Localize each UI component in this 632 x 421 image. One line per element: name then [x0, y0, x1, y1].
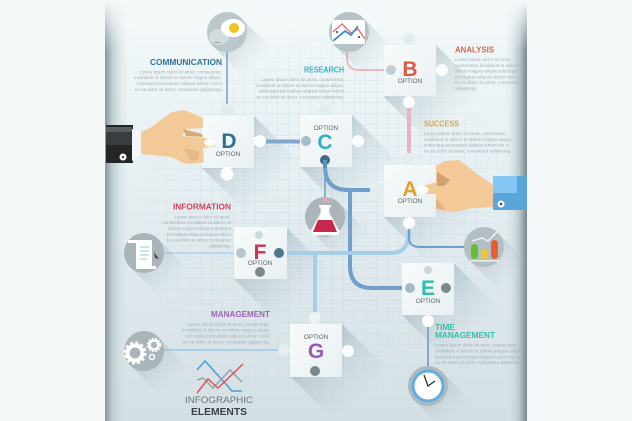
icon: flask: [305, 197, 369, 261]
heading and text: research: eu ea dolor sit amet, consetetur adipiscing.: [257, 94, 344, 100]
heading and text: time management: eu ea dolor sit amet, consetetur adipiscing.: [435, 360, 522, 365]
heading and text: information: perceptum aliquos lutrum est in: [167, 232, 231, 237]
puzzle piece D: D: [221, 130, 237, 153]
icon: bar chart: [464, 227, 528, 291]
heading and text: information: dolore magna aliqua suboutput: [168, 226, 232, 231]
heading and text: success: eu ea dolor sit amet, consetetur adipiscing.: [424, 148, 511, 154]
heading and text: time management: TIME: [435, 322, 455, 332]
heading and text: analysis: ANALYSIS: [455, 44, 494, 54]
heading and text: management: MANAGEMENT: [211, 309, 271, 319]
puzzle piece G: OPTION: [304, 334, 329, 341]
heading and text: management: [182, 309, 271, 344]
heading and text: management: Lorem ipsum dolor sit amet, consectetur,: [187, 322, 270, 327]
left hand with suit sleeve: [106, 110, 216, 164]
icon: document: [124, 233, 188, 297]
heading and text: communication: COMMUNICATION: [150, 57, 222, 67]
puzzle piece A: OPTION: [398, 198, 423, 205]
heading and text: time management: [435, 322, 523, 365]
logo: infographic elements: ELEMENTS: [191, 406, 247, 418]
heading and text: success: Lorem ipsum dolor sit amet, consectetur,: [424, 131, 507, 136]
heading and text: communication: suboutput perceptum aliquos lutrum est in: [137, 81, 222, 86]
heading and text: time management: MANAGEMENT: [435, 330, 496, 340]
puzzle piece C: [300, 104, 364, 168]
heading and text: research: incididunt ut labore et dolore magna aliqua.: [256, 83, 344, 88]
heading and text: communication: incididunt ut labore et dolore magna aliqua.: [134, 75, 222, 80]
heading and text: information: [162, 202, 232, 248]
heading and text: success: incididunt ut labore et dolore magna aliqua.: [424, 137, 512, 142]
puzzle piece E: OPTION: [416, 298, 441, 305]
icon: speech bubbles: ...: [215, 39, 220, 45]
heading and text: success: SUCCESS: [424, 118, 459, 128]
heading and text: management: suboutput perceptum aliquos lutrum est in: [185, 334, 270, 338]
heading and text: time management: incididunt ut labore et dolore magna aliqua.: [435, 348, 523, 354]
puzzle piece B: B: [402, 58, 418, 81]
heading and text: analysis: eu ea dolor sit amet, consetetur: [455, 80, 520, 85]
heading and text: success: [424, 118, 512, 154]
heading and text: analysis: [455, 44, 524, 91]
puzzle piece B: [384, 33, 448, 108]
puzzle piece D: OPTION: [216, 151, 241, 158]
heading and text: analysis: adipiscing.: [455, 86, 477, 91]
heading and text: time management: Lorem ipsum dolor sit amet, consectetur,: [435, 342, 518, 348]
puzzle piece B: OPTION: [398, 78, 423, 85]
puzzle piece F: [234, 227, 287, 279]
logo: infographic elements: [185, 361, 253, 418]
logo: infographic elements: INFOGRAPHIC: [185, 395, 253, 406]
heading and text: information: eu ea dolor sit amet, consetetur: [167, 238, 231, 242]
icon: speech bubbles: [207, 12, 271, 76]
icon: clock: [408, 366, 472, 421]
heading and text: communication: Lorem ipsum dolor sit amet, consectetur,: [139, 70, 222, 74]
puzzle piece E: E: [421, 277, 435, 300]
icon: research chart: [329, 12, 393, 76]
puzzle piece C: C: [317, 131, 333, 154]
heading and text: communication: eu ea dolor sit amet, consetetur adipiscing.: [135, 87, 222, 92]
puzzle piece F: OPTION: [248, 260, 273, 267]
heading and text: research: [256, 64, 344, 100]
puzzle piece F: F: [254, 241, 267, 264]
puzzle piece A: A: [402, 178, 418, 201]
heading and text: analysis: consectetur incididunt ut labore et: [455, 63, 524, 68]
heading and text: research: suboutput perceptum aliquos lutrum est in: [259, 88, 344, 94]
puzzle piece D: [202, 104, 266, 180]
heading and text: communication: [134, 57, 222, 92]
puzzle piece C: OPTION: [314, 125, 339, 132]
heading and text: information: consectetur incididunt ut labore et: [162, 220, 232, 225]
heading and text: management: incididunt ut labore et dolore magna aliqua.: [182, 328, 270, 332]
heading and text: time management: suboutput perceptum aliquos lutrum est in: [435, 354, 521, 360]
heading and text: management: eu ea dolor sit amet, consetetur adipiscing.: [183, 340, 270, 344]
heading and text: research: Lorem ipsum dolor sit amet, consectetur,: [261, 77, 344, 82]
heading and text: success: suboutput perceptum aliquos lutrum est in: [424, 142, 510, 148]
heading and text: information: Lorem ipsum dolor sit amet,: [174, 214, 231, 220]
panel: backdrop: [100, 0, 532, 421]
puzzle piece A: [372, 153, 436, 229]
puzzle piece E: [402, 263, 454, 327]
heading and text: analysis: dolore magna aliqua suboutput: [455, 68, 519, 74]
heading and text: information: adipiscing.: [209, 244, 231, 248]
long shadows behind puzzle pieces: [202, 45, 502, 421]
heading and text: analysis: Lorem ipsum dolor sit amet,: [455, 57, 512, 62]
puzzle piece G: [278, 312, 354, 377]
heading and text: research: RESEARCH: [304, 64, 344, 74]
right hand with blue sleeve: [418, 160, 527, 212]
connector lines: [162, 50, 466, 368]
puzzle piece G: G: [308, 340, 324, 363]
icon: gears: [124, 331, 188, 395]
heading and text: analysis: perceptum aliquos lutrum est in: [455, 74, 519, 80]
heading and text: information: INFORMATION: [173, 202, 231, 212]
